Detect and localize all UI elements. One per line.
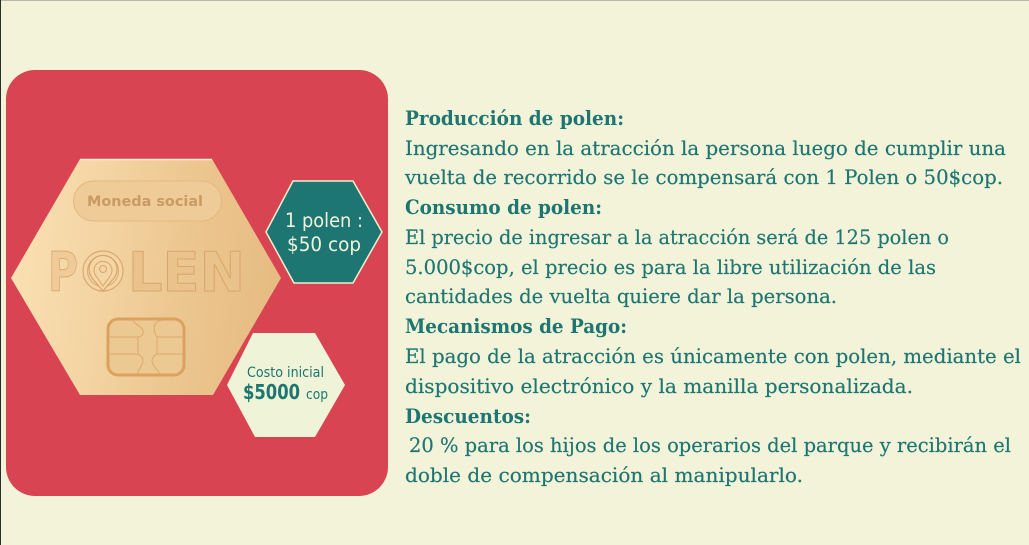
text block: descuentos: doble de compensación al manipularlo.: [405, 463, 803, 487]
text block: consumo de polen: 5.000$cop, el precio es para la libre utilización de las: [405, 255, 936, 279]
heading: producción de polen: Producción de polen:: [405, 106, 624, 130]
text block: producción de polen: vuelta de recorrido se le compensará con 1 Polen o 50$cop.: [404, 165, 1003, 189]
coin logo: POLEN: [48, 241, 245, 304]
text block: consumo de polen: [405, 195, 949, 308]
coin logo: POLEN: LEN: [128, 241, 245, 304]
callout: costo inicial $5000 cop: $5000: [243, 380, 300, 404]
coin logo: POLEN: P: [48, 241, 78, 304]
icon: chip: [108, 319, 184, 375]
text block: mecanismos de pago: dispositivo electrónico y la manilla personalizada.: [405, 374, 913, 398]
callout: 1 polen = $50 cop: 1 polen :: [285, 209, 363, 232]
text block: consumo de polen: cantidades de vuelta quiere dar la persona.: [405, 284, 837, 308]
callout: 1 polen = $50 cop: [266, 181, 382, 283]
coin label: Moneda social: Moneda social: [87, 194, 203, 210]
heading: descuentos: Descuentos:: [405, 404, 531, 428]
heading: consumo de polen: Consumo de polen:: [405, 195, 602, 219]
heading: mecanismos de pago: Mecanismos de Pago:: [405, 314, 627, 338]
text block: descuentos: [405, 404, 1011, 487]
text block: mecanismos de pago: [405, 314, 1021, 398]
coin label: Moneda social: [74, 181, 222, 221]
text block: producción de polen: [404, 106, 1006, 189]
callout: costo inicial $5000 cop: Costo inicial: [247, 365, 324, 381]
callout: 1 polen = $50 cop: $50 cop: [287, 233, 361, 256]
text block: consumo de polen: El precio de ingresar a la atracción será de 125 polen o: [405, 225, 949, 249]
text block: mecanismos de pago: El pago de la atracción es únicamente con polen, mediante el: [405, 344, 1021, 368]
panel: red coin panel: [6, 70, 388, 496]
text block: producción de polen: Ingresando en la atracción la persona luego de cumplir una: [405, 136, 1006, 160]
text block: descuentos: 20 % para los hijos de los operarios del parque y recibirán el: [409, 433, 1011, 457]
callout: costo inicial $5000 cop: cop: [306, 387, 328, 403]
callout: costo inicial $5000 cop: [227, 333, 345, 437]
icon: polen hexagonal coin: [11, 159, 281, 395]
